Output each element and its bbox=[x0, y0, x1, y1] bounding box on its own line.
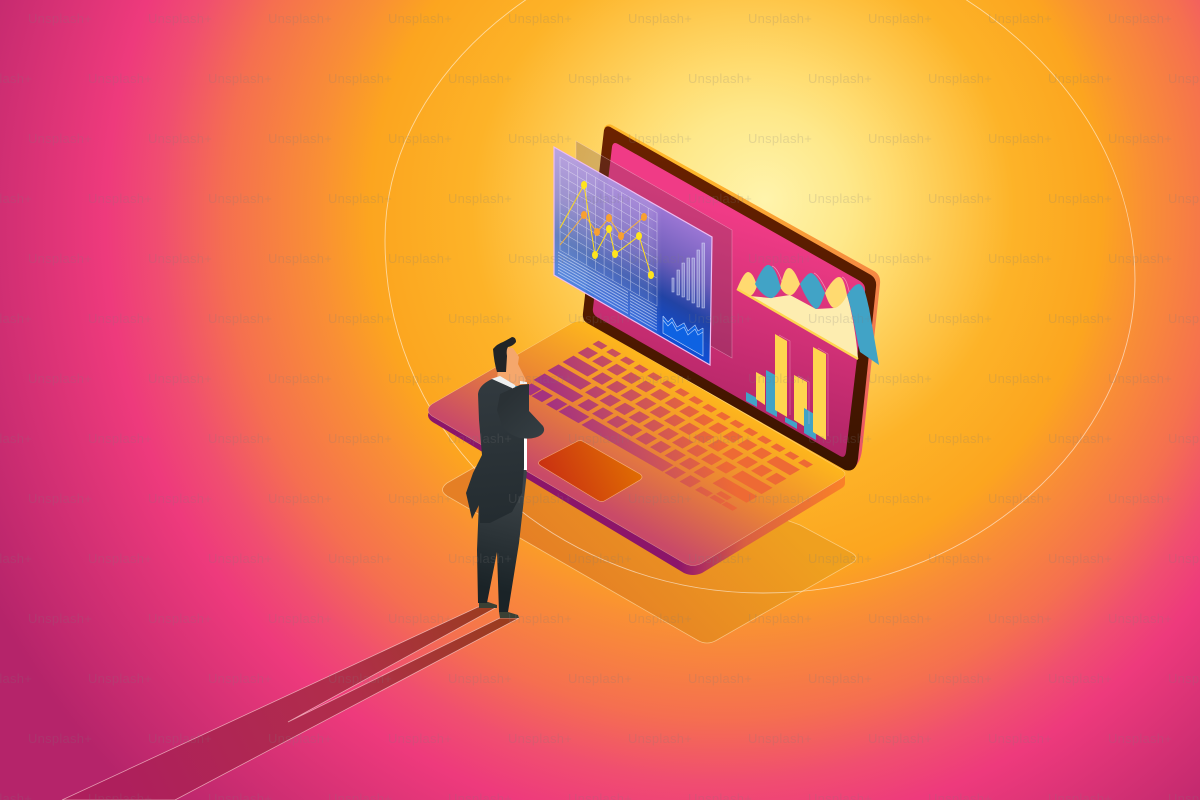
wave baseline bbox=[737, 289, 858, 359]
watermark grid: Unsplash+ bbox=[1108, 131, 1172, 146]
orange line series bbox=[560, 211, 647, 245]
watermark grid: Unsplash+ bbox=[448, 431, 512, 446]
watermark grid: Unsplash+ bbox=[88, 311, 152, 326]
yellow humps bbox=[737, 268, 847, 308]
neck and face bbox=[497, 347, 526, 386]
watermark grid: Unsplash+ bbox=[268, 131, 332, 146]
watermark grid: Unsplash+ bbox=[28, 731, 92, 746]
watermark grid: Unsplash+ bbox=[448, 671, 512, 686]
watermark grid: Unsplash+ bbox=[268, 371, 332, 386]
watermark grid: Unsplash+ bbox=[328, 671, 392, 686]
watermark grid: Unsplash+ bbox=[868, 731, 932, 746]
watermark grid: Unsplash+ bbox=[748, 11, 812, 26]
watermark grid: Unsplash+ bbox=[1108, 371, 1172, 386]
watermark grid: Unsplash+ bbox=[268, 251, 332, 266]
watermark grid: Unsplash+ bbox=[328, 431, 392, 446]
watermark grid: Unsplash+ bbox=[988, 131, 1052, 146]
trousers bbox=[477, 465, 527, 612]
shirt strip bbox=[522, 436, 527, 470]
tie bbox=[515, 386, 528, 412]
watermark grid: Unsplash+ bbox=[928, 431, 992, 446]
watermark grid: Unsplash+ bbox=[448, 311, 512, 326]
watermark grid: Unsplash+ bbox=[748, 611, 812, 626]
watermark grid: Unsplash+ bbox=[868, 371, 932, 386]
watermark grid: Unsplash+ bbox=[88, 71, 152, 86]
watermark grid: Unsplash+ bbox=[508, 611, 572, 626]
hair bbox=[493, 337, 516, 372]
watermark grid: Unsplash+ bbox=[148, 251, 212, 266]
watermark grid: Unsplash+ bbox=[28, 491, 92, 506]
laptop base edge bbox=[428, 407, 845, 575]
watermark grid: Unsplash+ bbox=[568, 551, 632, 566]
watermark grid: Unsplash+ bbox=[1048, 551, 1112, 566]
laptop bbox=[428, 124, 880, 575]
watermark grid: Unsplash+ bbox=[988, 371, 1052, 386]
watermark grid: Unsplash+ bbox=[1048, 71, 1112, 86]
watermark grid: Unsplash+ bbox=[508, 11, 572, 26]
watermark grid: Unsplash+ bbox=[1048, 671, 1112, 686]
touchpad bbox=[538, 440, 642, 502]
panel glass bbox=[554, 147, 712, 365]
folded arm bbox=[497, 384, 544, 439]
watermark grid: Unsplash+ bbox=[628, 131, 692, 146]
watermark grid: Unsplash+ bbox=[508, 371, 572, 386]
watermark grid: Unsplash+ bbox=[988, 731, 1052, 746]
watermark grid: Unsplash+ bbox=[268, 731, 332, 746]
laptop deck bbox=[428, 321, 845, 566]
watermark grid: Unsplash+ bbox=[28, 611, 92, 626]
teal small bar bbox=[746, 392, 757, 407]
watermark grid: Unsplash+ bbox=[1048, 191, 1112, 206]
floating data panel bbox=[554, 147, 712, 365]
businessman bbox=[466, 337, 544, 618]
watermark grid: Unsplash+ bbox=[88, 431, 152, 446]
watermark grid: Unsplash+ bbox=[808, 551, 872, 566]
watermark grid: Unsplash+ bbox=[388, 611, 452, 626]
watermark grid: Unsplash+ bbox=[808, 191, 872, 206]
mini area chart bbox=[663, 316, 703, 356]
cream area bbox=[737, 289, 858, 358]
watermark grid: Unsplash+ bbox=[148, 371, 212, 386]
tall yellow bar right bbox=[813, 347, 826, 440]
shoes bbox=[479, 602, 519, 618]
watermark grid: Unsplash+ bbox=[808, 71, 872, 86]
watermark grid: Unsplash+ bbox=[1108, 491, 1172, 506]
watermark grid: Unsplash+ bbox=[628, 251, 692, 266]
watermark grid: Unsplash+ bbox=[508, 131, 572, 146]
watermark grid: Unsplash+ bbox=[688, 551, 752, 566]
watermark grid: Unsplash+ bbox=[688, 311, 752, 326]
watermark grid: Unsplash+ bbox=[808, 311, 872, 326]
man's shadow bbox=[62, 607, 519, 800]
watermark grid: Unsplash+ bbox=[628, 611, 692, 626]
watermark grid: Unsplash+ bbox=[148, 491, 212, 506]
medium yellow bar bbox=[794, 375, 807, 428]
watermark grid: Unsplash+ bbox=[208, 431, 272, 446]
watermark grid: Unsplash+ bbox=[1048, 311, 1112, 326]
small teal bar bbox=[785, 417, 797, 429]
watermark grid: Unsplash+ bbox=[328, 311, 392, 326]
watermark grid: Unsplash+ bbox=[328, 71, 392, 86]
watermark grid: Unsplash+ bbox=[268, 11, 332, 26]
watermark grid: Unsplash+ bbox=[808, 431, 872, 446]
watermark grid: Unsplash+ bbox=[1108, 731, 1172, 746]
watermark grid: Unsplash+ bbox=[568, 191, 632, 206]
watermark grid: Unsplash+ bbox=[928, 311, 992, 326]
watermark grid: Unsplash+ bbox=[148, 131, 212, 146]
watermark grid: Unsplash+ bbox=[928, 191, 992, 206]
grid bbox=[560, 157, 657, 306]
watermark grid: Unsplash+ bbox=[988, 611, 1052, 626]
yellow line series bbox=[560, 181, 654, 279]
watermark grid: Unsplash+ bbox=[448, 71, 512, 86]
watermark grid: Unsplash+ bbox=[748, 491, 812, 506]
watermark grid: Unsplash+ bbox=[388, 251, 452, 266]
watermark grid: Unsplash+ bbox=[868, 251, 932, 266]
watermark grid: Unsplash+ bbox=[88, 671, 152, 686]
watermark grid: Unsplash+ bbox=[868, 611, 932, 626]
watermark grid: Unsplash+ bbox=[448, 551, 512, 566]
yellow small bar bbox=[756, 372, 765, 405]
watermark grid: Unsplash+ bbox=[688, 671, 752, 686]
watermark grid: Unsplash+ bbox=[868, 11, 932, 26]
watermark grid: Unsplash+ bbox=[448, 191, 512, 206]
watermark grid: Unsplash+ bbox=[748, 371, 812, 386]
watermark grid: Unsplash+ bbox=[28, 251, 92, 266]
watermark grid: Unsplash+ bbox=[88, 551, 152, 566]
watermark grid: Unsplash+ bbox=[508, 731, 572, 746]
watermark grid: Unsplash+ bbox=[268, 491, 332, 506]
watermark grid: Unsplash+ bbox=[868, 491, 932, 506]
teal bar right bbox=[804, 408, 816, 440]
screen back edge bbox=[604, 124, 880, 470]
collar bbox=[491, 376, 520, 393]
watermark grid: Unsplash+ bbox=[688, 71, 752, 86]
watermark grid: Unsplash+ bbox=[1108, 251, 1172, 266]
watermark grid: Unsplash+ bbox=[88, 191, 152, 206]
teal bar bbox=[766, 370, 777, 417]
watermark grid: Unsplash+ bbox=[388, 371, 452, 386]
watermark grid: Unsplash+ bbox=[868, 131, 932, 146]
watermark grid: Unsplash+ bbox=[208, 551, 272, 566]
watermark grid: Unsplash+ bbox=[568, 71, 632, 86]
watermark grid: Unsplash+ bbox=[928, 71, 992, 86]
screen display bbox=[593, 143, 865, 457]
watermark grid: Unsplash+ bbox=[28, 371, 92, 386]
watermark grid: Unsplash+ bbox=[748, 251, 812, 266]
teal humps bbox=[755, 265, 879, 365]
watermark grid: Unsplash+ bbox=[748, 131, 812, 146]
watermark grid: Unsplash+ bbox=[388, 11, 452, 26]
watermark grid: Unsplash+ bbox=[988, 11, 1052, 26]
watermark grid: Unsplash+ bbox=[628, 11, 692, 26]
watermark grid: Unsplash+ bbox=[148, 611, 212, 626]
watermark grid: Unsplash+ bbox=[928, 551, 992, 566]
watermark grid: Unsplash+ bbox=[208, 191, 272, 206]
watermark grid: Unsplash+ bbox=[28, 11, 92, 26]
watermark grid: Unsplash+ bbox=[148, 731, 212, 746]
watermark grid: Unsplash+ bbox=[328, 551, 392, 566]
jacket with tails bbox=[466, 379, 524, 523]
watermark grid: Unsplash+ bbox=[388, 731, 452, 746]
watermark grid: Unsplash+ bbox=[388, 131, 452, 146]
watermark grid: Unsplash+ bbox=[1108, 11, 1172, 26]
table rows bbox=[558, 252, 657, 330]
watermark grid: Unsplash+ bbox=[688, 431, 752, 446]
watermark grid: Unsplash+ bbox=[568, 311, 632, 326]
watermark grid: Unsplash+ bbox=[988, 251, 1052, 266]
watermark grid: Unsplash+ bbox=[148, 11, 212, 26]
watermark grid: Unsplash+ bbox=[208, 71, 272, 86]
wave chart on screen bbox=[737, 265, 879, 365]
watermark grid: Unsplash+ bbox=[808, 671, 872, 686]
tall yellow bar bbox=[775, 334, 787, 417]
watermark grid: Unsplash+ bbox=[268, 611, 332, 626]
watermark grid: Unsplash+ bbox=[628, 371, 692, 386]
watermark grid: Unsplash+ bbox=[328, 191, 392, 206]
keyboard bbox=[520, 342, 810, 509]
glow circle outline bbox=[385, 0, 1135, 593]
cuff bbox=[520, 381, 527, 384]
watermark grid: Unsplash+ bbox=[1108, 611, 1172, 626]
watermark grid: Unsplash+ bbox=[988, 491, 1052, 506]
watermark grid: Unsplash+ bbox=[748, 731, 812, 746]
watermark grid: Unsplash+ bbox=[28, 131, 92, 146]
watermark grid: Unsplash+ bbox=[928, 671, 992, 686]
watermark grid: Unsplash+ bbox=[568, 671, 632, 686]
watermark grid: Unsplash+ bbox=[508, 251, 572, 266]
watermark grid: Unsplash+ bbox=[568, 431, 632, 446]
mini bars bbox=[672, 243, 704, 308]
ground plate under laptop bbox=[442, 430, 856, 643]
bar chart on screen bbox=[746, 334, 828, 440]
watermark grid: Unsplash+ bbox=[1048, 431, 1112, 446]
watermark grid: Unsplash+ bbox=[688, 191, 752, 206]
watermark grid: Unsplash+ bbox=[628, 491, 692, 506]
watermark grid: Unsplash+ bbox=[508, 491, 572, 506]
watermark grid: Unsplash+ bbox=[208, 671, 272, 686]
rear translucent panel bbox=[576, 141, 732, 358]
watermark grid: Unsplash+ bbox=[628, 731, 692, 746]
screen frame bbox=[583, 126, 876, 471]
watermark grid: Unsplash+ bbox=[388, 491, 452, 506]
watermark grid: Unsplash+ bbox=[208, 311, 272, 326]
